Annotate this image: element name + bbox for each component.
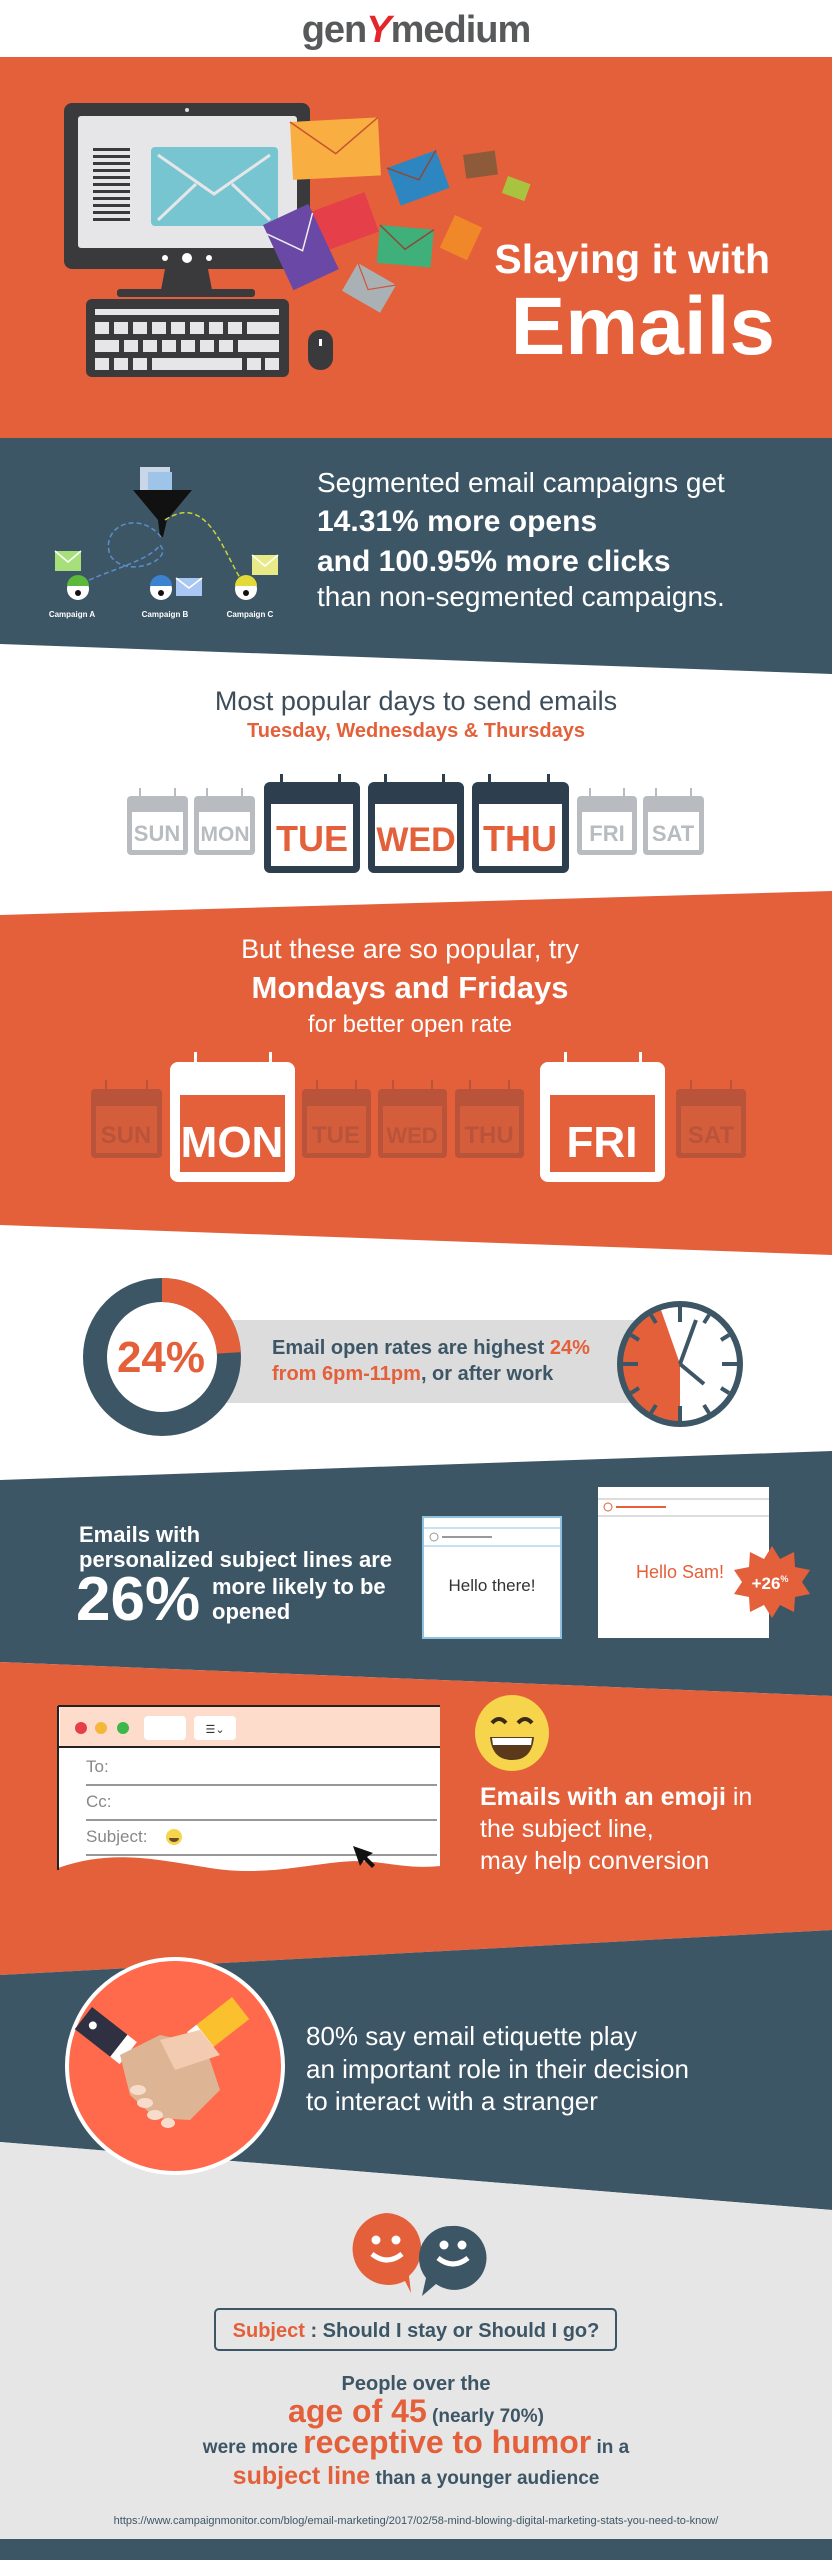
icon: handshake: [67, 1959, 283, 2173]
calendars: better days: MON: [181, 1118, 283, 1167]
email composer window: [58, 1706, 440, 1871]
title: [494, 236, 775, 372]
text: personalized subject lines: 26%: [76, 1565, 200, 1634]
title: Slaying it with: [494, 236, 770, 282]
calendars: better days: TUE: [312, 1122, 360, 1149]
badge: +26%: +26: [752, 1574, 780, 1593]
heading: most popular days: Most popular days to send emails: [215, 686, 617, 716]
icon: segmentation funnel: Campaign B: [142, 610, 189, 619]
text: personalized subject lines: opened: [212, 1599, 290, 1624]
calendars: popular days: FRI: [589, 821, 625, 846]
heading: try mondays and fridays: But these are so popular, try: [241, 934, 579, 964]
text: segmented campaigns stat: Segmented email campaigns get: [317, 467, 725, 498]
badge: +26%: [734, 1546, 810, 1618]
donut chart: 24%: [95, 1290, 229, 1424]
email composer window: Cc:: [86, 1792, 112, 1811]
text: etiquette stat: [306, 2021, 689, 2116]
email preview: hello there: Hello there!: [449, 1576, 535, 1595]
text: personalized subject lines: [76, 1522, 392, 1634]
text: emoji stat: [480, 1783, 752, 1875]
email preview: hello sam: Hello Sam!: [636, 1562, 724, 1582]
logo: genYmedium: [302, 9, 530, 51]
calendars: popular days: THU: [483, 818, 557, 859]
icon: grinning emoji: [475, 1695, 549, 1771]
icon: clock: [619, 1304, 740, 1424]
icon: segmentation funnel: Campaign C: [227, 610, 274, 619]
text: humor stat: People over the: [342, 2373, 490, 2395]
heading: try mondays and fridays: for better open rate: [308, 1011, 512, 1038]
calendars: better days: THU: [464, 1122, 514, 1149]
text: personalized subject lines: Emails with: [79, 1522, 200, 1547]
text: etiquette stat: to interact with a stranger: [306, 2086, 598, 2116]
calendars: popular days: WED: [376, 821, 456, 859]
icon: segmentation funnel: Campaign A: [49, 610, 95, 619]
calendars: popular days: TUE: [276, 818, 348, 859]
subject line box: [215, 2309, 616, 2350]
title: Emails: [511, 281, 775, 372]
stat bar: open rates 6pm-11pm: [200, 1320, 640, 1403]
text: segmented campaigns stat: 14.31% more opens: [317, 505, 597, 538]
calendars: popular days: [127, 774, 704, 873]
calendars: better days: WED: [386, 1123, 438, 1148]
subject line box: Subject : Should I stay or Should I go?: [233, 2320, 599, 2342]
calendars: better days: SAT: [688, 1122, 734, 1149]
calendars: popular days: MON: [200, 823, 250, 846]
text: etiquette stat: an important role in their decision: [306, 2054, 689, 2084]
calendars: popular days: SAT: [652, 821, 695, 846]
text: segmented campaigns stat: than non-segmented campaigns.: [317, 581, 725, 612]
donut chart: 24%: 24%: [117, 1333, 205, 1382]
text: personalized subject lines: more likely to be: [212, 1574, 386, 1599]
email preview: hello sam: [598, 1487, 769, 1638]
heading: try mondays and fridays: Mondays and Fridays: [252, 970, 568, 1005]
email composer window: To:: [86, 1757, 109, 1776]
icon: speech bubble faces: [353, 2213, 487, 2296]
text: humor stat: were more receptive to humor in a: [202, 2424, 630, 2460]
email composer window: ☰⌄: [205, 1724, 225, 1736]
heading: most popular days: Tuesday, Wednesdays & Thursdays: [247, 720, 585, 742]
calendars: better days: [91, 1052, 746, 1182]
icon: computer with flying envelopes: [64, 103, 531, 377]
text: segmented campaigns stat: and 100.95% more clicks: [317, 545, 671, 578]
text: etiquette stat: 80% say email etiquette play: [306, 2021, 637, 2051]
stat bar: open rates 6pm-11pm: Email open rates are highest 24%: [272, 1337, 590, 1359]
text: emoji stat: may help conversion: [480, 1847, 709, 1875]
calendars: better days: SUN: [101, 1122, 151, 1149]
stat bar: open rates 6pm-11pm: from 6pm-11pm, or after work: [272, 1363, 554, 1385]
calendars: popular days: SUN: [134, 821, 180, 846]
heading: most popular days: [215, 686, 617, 742]
text: segmented campaigns stat: [317, 467, 725, 612]
heading: try mondays and fridays: [241, 934, 579, 1038]
icon: segmentation funnel: [49, 467, 278, 619]
text: humor stat: subject line than a younger audience: [233, 2462, 599, 2490]
badge: +26%: %: [780, 1574, 788, 1584]
source url: https://www.campaignmonitor.com/blog/email-marketing/2017/02/58-mind-blowing-digital-marketing-stats-you-need-to-know/: [114, 2515, 719, 2527]
email composer window: Subject:: [86, 1827, 147, 1846]
calendars: better days: FRI: [567, 1118, 637, 1167]
text: personalized subject lines: personalized subject lines are: [79, 1547, 392, 1572]
text: humor stat: age of 45 (nearly 70%): [288, 2393, 544, 2429]
email preview: hello there: [423, 1517, 561, 1638]
text: emoji stat: the subject line,: [480, 1815, 654, 1843]
text: emoji stat: Emails with an emoji in: [480, 1783, 752, 1811]
text: humor stat: [202, 2373, 630, 2490]
